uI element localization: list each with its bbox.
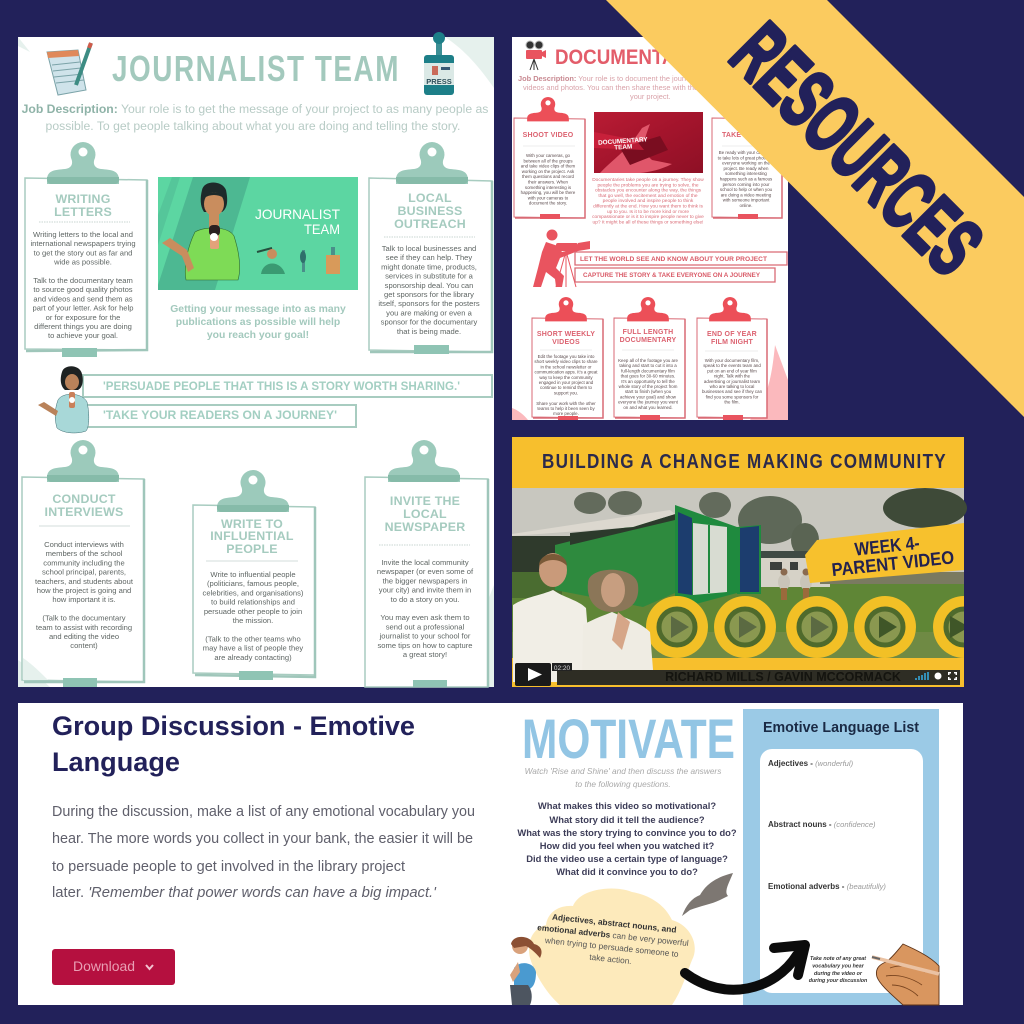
card: end of year film night: find you some sponsors for [706, 394, 759, 399]
card: conduct interviews: teachers, and students about [35, 577, 134, 586]
card: short weekly videos [532, 297, 603, 420]
card: end of year film night: END OF YEAR [707, 331, 757, 338]
questions: How did you feel when you watched it? [540, 840, 715, 851]
documentary description: compassionate or is it to inspire people never to give [592, 214, 704, 220]
strip: let the world see: LET THE WORLD SEE AND KNOW ABOUT YOUR PROJECT [580, 256, 768, 263]
questions: What story did it tell the audience? [549, 814, 705, 825]
panel: emotive language list: Abstract nouns - (confidence) [768, 820, 876, 829]
card: take photos: project. Be ready when [724, 166, 769, 171]
card: local business outreach [369, 142, 492, 354]
card: writing letters: international newspapers trying [30, 239, 136, 248]
card: write to influential people: INFLUENTIAL [210, 529, 294, 543]
card: shoot video: and take video clips of them [521, 164, 576, 169]
card: end of year film night: the film. [724, 400, 740, 405]
card: full length documentary: everyone the journey you went [618, 400, 679, 405]
card: writing letters: and videos and send them as [33, 294, 133, 303]
card: end of year film night: who are talking to local [710, 384, 754, 389]
card: write to influential people: may have a list of people they [203, 644, 303, 653]
card: invite the local newspaper: newspaper (or even some of [377, 567, 474, 576]
questions: Did the video use a certain type of language? [526, 853, 728, 864]
card: writing letters: Talk to the documentary team [33, 276, 133, 285]
card: invite the local newspaper: INVITE THE [390, 494, 460, 508]
card: writing letters: wide as possible. [53, 258, 112, 267]
card: end of year film night: put on an end of year film [707, 368, 757, 373]
card: full length documentary: full-length documentary film [621, 368, 675, 373]
callout: cloud: emotional adverbs can be very powerful [537, 922, 689, 948]
card: shoot video: between all of the groups [523, 158, 573, 163]
job description: Job Description: Your role is to document the journey of your project through [518, 74, 772, 83]
panel: emotive language list: vocabulary you hear [812, 964, 865, 970]
panel: video [512, 437, 967, 687]
documentary description: that go well, the excitement and emotion of the [598, 193, 698, 199]
icon: notepad and pencil [47, 43, 91, 95]
card: local business outreach: sponsor for the documentary [381, 318, 478, 327]
image: documentary team [594, 112, 703, 173]
card: writing letters: to source good quality photos [33, 285, 133, 294]
arrow [685, 945, 805, 990]
card: local business outreach: get sponsors for the library [384, 290, 474, 299]
card: conduct interviews: how the project is going and [37, 586, 131, 595]
card: invite the local newspaper: Invite the local community [381, 558, 469, 567]
card: short weekly videos: way to keep the community [539, 375, 593, 380]
documentary description: Documentaries take people on a journey. They show [592, 177, 704, 183]
card: take photos [712, 118, 782, 219]
card: take photos: are doing a video meeting [721, 192, 772, 197]
card: short weekly videos: continue to remind them to [540, 385, 593, 390]
questions: What makes this video so motivational? [538, 800, 716, 811]
card: end of year film night: night. Talk with the [714, 374, 751, 379]
card: end of year film night: advertising or journalist team [704, 379, 760, 384]
heading: motivate: MOTIVATE [522, 707, 735, 770]
card: full length documentary: whole story of the project from [619, 384, 678, 389]
card: local business outreach: that is being made. [397, 327, 461, 336]
card: short weekly videos: more people. [553, 411, 579, 416]
strip: let the world see [575, 252, 787, 265]
card: conduct interviews: community including the [43, 558, 125, 567]
card: write to influential people: (politicians, famous people, [207, 579, 299, 588]
card: full length documentary: start to finish (when you [625, 389, 672, 394]
badge: week 4 parent video: WEEK 4- [854, 532, 920, 560]
card: full length documentary [614, 297, 685, 420]
card: writing letters: LETTERS [54, 205, 112, 219]
icons: journalist tools [257, 247, 340, 274]
card: write to influential people [193, 470, 315, 680]
card: take photos: online. [740, 203, 752, 208]
image: documentary team: DOCUMENTARY [598, 136, 649, 147]
card: invite the local newspaper: journalist to your school for [379, 632, 471, 641]
card: take photos: with someone important [723, 198, 770, 203]
icon: runner [510, 937, 542, 1005]
card: invite the local newspaper: your city) and invite them in [379, 586, 471, 595]
card: shoot video: happening, you will be there [521, 190, 576, 195]
job description: videos and photos. You can then share these with the community and your [523, 83, 767, 92]
badge: week 4 parent video [805, 523, 964, 583]
card: full length documentary: FULL LENGTH [623, 329, 673, 336]
badge: week 4 parent video: PARENT VIDEO [831, 546, 955, 580]
caption: you reach your goal! [207, 330, 309, 341]
documentary description: people involved and inspire people to think [603, 198, 694, 204]
card: short weekly videos: in the school newsletter or [540, 364, 592, 369]
card: invite the local newspaper: the bigger newspapers in [383, 576, 467, 585]
play wheels [646, 596, 964, 658]
video controls: RICHARD MILLS / GAVIN MCCORMACK [665, 670, 901, 684]
card: invite the local newspaper: NEWSPAPER [385, 520, 465, 534]
card: local business outreach: sponsorship deal. You can [385, 281, 473, 290]
heading: Group Discussion - Emotive [52, 711, 415, 741]
card: full length documentary: DOCUMENTARY [620, 337, 676, 344]
questions: What was the story trying to convince you to do? [517, 827, 737, 838]
body text: later. 'Remember that power words can have a big impact.' [52, 885, 436, 901]
card: shoot video: document the story. [529, 201, 567, 206]
card: conduct interviews [22, 440, 144, 687]
panel: group discussion [18, 703, 963, 1005]
card: full length documentary: that goes for 30-60 minutes. [621, 374, 675, 379]
card: conduct interviews: and editing the video [49, 632, 119, 641]
icon: eagle [682, 873, 733, 916]
card: writing letters: WRITING [55, 192, 111, 206]
card: full length documentary: achieve your goal) and show [620, 394, 677, 399]
panel: emotive language list: during the video or [814, 971, 863, 977]
strip: capture the story: CAPTURE THE STORY & TAKE EVERYONE ON A JOURNEY [583, 272, 760, 279]
label: journalist team: JOURNALIST [255, 206, 340, 222]
callout: cloud: when trying to persuade someone to [544, 935, 679, 959]
card: full length documentary: Keep all of the footage you are [618, 358, 678, 363]
job description: possible. To get people talking about what you are doing and telling the story. [46, 119, 460, 133]
card: shoot video: SHOOT VIDEO [523, 132, 574, 139]
card: write to influential people: WRITE TO [221, 517, 283, 531]
card: shoot video: with your cameras to [528, 195, 569, 200]
panel: emotive language list: Emotive Language List [763, 720, 919, 736]
card: local business outreach: LOCAL [408, 191, 452, 205]
title: JOURNALIST TEAM [112, 48, 400, 89]
icon: movie camera [526, 41, 546, 70]
card: take photos: Be ready with your cameras [719, 150, 774, 155]
icon: press badge [424, 32, 454, 95]
video controls [515, 663, 960, 686]
presenters [513, 553, 654, 682]
card: local business outreach: itself, sponsors for the posters [378, 299, 480, 308]
icon: press badge: PRESS [426, 77, 452, 86]
heading: Language [52, 747, 180, 777]
card: take photos: everyone working on the [722, 161, 770, 166]
card: invite the local newspaper: send out a professional [386, 622, 465, 631]
card: end of year film night: FILM NIGHT [711, 339, 754, 346]
title: DOCUMENTARY TEAM [555, 46, 759, 69]
card: short weekly videos: engaged in your project and [539, 380, 594, 385]
card: local business outreach: BUSINESS [398, 204, 462, 218]
banner [606, 0, 1024, 417]
quote strip 2 [83, 405, 356, 427]
callout: cloud [529, 889, 695, 1005]
card: shoot video: working on the project. Ask [522, 169, 575, 174]
documentary description: obstacles you encounter along the way, the things [595, 188, 702, 194]
card: short weekly videos: SHORT WEEKLY [537, 331, 595, 338]
card: conduct interviews: team to assist with recording [36, 623, 132, 632]
card: writing letters [25, 142, 147, 357]
card: conduct interviews: school principal, parents, [42, 568, 126, 577]
panel: journalist team [18, 32, 494, 687]
card: write to influential people: the mission. [233, 616, 273, 625]
card: shoot video [514, 97, 585, 219]
card: conduct interviews: CONDUCT [52, 492, 116, 506]
card: write to influential people: (Talk to the other teams who [205, 634, 301, 643]
card: write to influential people: PEOPLE [226, 542, 278, 556]
documentary description: people the problems you are trying to solve, the [597, 182, 699, 188]
video title: BUILDING A CHANGE MAKING COMMUNITY [542, 451, 947, 473]
card: write to influential people: Write to influential people [210, 570, 296, 579]
card: local business outreach: OUTREACH [394, 217, 466, 231]
card: full length documentary: It's an opportunity to tell the [621, 379, 675, 384]
panel: emotive language list: Emotional adverbs - (beautifully) [768, 882, 886, 891]
card: writing letters: to achieve your goal. [48, 331, 118, 340]
image: journalist team banner [158, 177, 358, 290]
documentary description: up? It might be all of these things or something else! [593, 219, 703, 225]
card: writing letters: Writing letters to the local and [33, 230, 133, 239]
card: end of year film night: With your documentary film, [705, 358, 759, 363]
card: invite the local newspaper [365, 440, 488, 687]
card: short weekly videos: support you. [554, 390, 578, 395]
card: full length documentary: taking and start to cut it into a [619, 363, 677, 368]
card: shoot video: something interesting is [525, 185, 572, 190]
job description: your project. [630, 92, 671, 101]
card: conduct interviews: INTERVIEWS [45, 505, 123, 519]
instruction: to the following questions. [575, 779, 671, 789]
quote strip 1: 'PERSUADE PEOPLE THAT THIS IS A STORY WORTH SHARING.' [103, 379, 460, 393]
card: take photos: to take lots of great photos of [718, 155, 775, 160]
card: write to influential people: to build relationships and [211, 598, 295, 607]
card: take photos: TAKE PHOTOS [722, 132, 774, 139]
card: local business outreach: you are making or even a [386, 308, 473, 317]
card: invite the local newspaper: a great story! [403, 650, 447, 659]
body text: to persuade people to get involved in the library project [52, 859, 405, 875]
job description: Job Description: Your role is to get the message of your project to as many people as [22, 102, 488, 116]
card: invite the local newspaper: LOCAL [403, 507, 447, 521]
panel: emotive language list: during your discussion [809, 978, 868, 984]
card: invite the local newspaper: some tips on how to capture [378, 641, 472, 650]
card: conduct interviews: (Talk to the documentary [42, 614, 126, 623]
card: full length documentary: on and what you learned. [623, 405, 673, 410]
callout: cloud: take action. [589, 952, 632, 966]
card: writing letters: different things you are doing [34, 322, 132, 331]
card: conduct interviews: how important it is. [52, 595, 116, 604]
questions: What did it convince you to do? [556, 866, 698, 877]
callout: cloud: Adjectives, abstract nouns, and [552, 912, 677, 935]
label: journalist team: TEAM [304, 221, 340, 237]
card: conduct interviews: Conduct interviews with [44, 540, 124, 549]
caption: publications as possible will help [176, 317, 340, 328]
card: invite the local newspaper: You may even ask them to [380, 613, 470, 622]
card: writing letters: or for exposure for the [46, 313, 120, 322]
card: short weekly videos: communication apps. It's a great [534, 370, 598, 375]
card: shoot video: With your cameras, go [526, 153, 571, 158]
card: short weekly videos: VIDEOS [552, 339, 580, 346]
icon: writing hand [872, 944, 939, 1005]
card: take photos: something interesting [725, 171, 767, 176]
card: shoot video: their answers. When [528, 180, 569, 184]
card: conduct interviews: content) [70, 641, 98, 650]
button: download [52, 949, 175, 985]
instruction: Watch 'Rise and Shine' and then discuss the answers [525, 766, 721, 776]
body text: During the discussion, make a list of any emotional vocabulary you [52, 804, 475, 820]
panel: emotive language list [743, 709, 939, 1005]
quote strip 2: 'TAKE YOUR READERS ON A JOURNEY' [103, 408, 337, 422]
illustration: reporter [162, 182, 240, 280]
card: local business outreach: might donate time, products, [381, 262, 477, 271]
card: local business outreach: services in substitute for a [385, 272, 474, 281]
card: short weekly videos: Share your work with the other [536, 401, 596, 406]
video scene [512, 488, 967, 658]
panel: emotive language list: Adjectives - (wonderful) [768, 759, 854, 768]
button: download: Download [73, 958, 135, 974]
card: short weekly videos: teams to help it been seen by [537, 406, 595, 411]
video controls: 02:20 [554, 665, 571, 672]
card: short weekly videos: short weekly video clips to share [534, 359, 598, 364]
icon: cameraman [533, 230, 590, 287]
card: local business outreach: Talk to local businesses and [382, 244, 476, 253]
body text: hear. The more words you collect in your bank, the easier it will be [52, 831, 473, 847]
panel: emotive language list: Take note of any great [810, 956, 866, 962]
card: take photos: happens such as a famous [720, 176, 773, 182]
documentary description: up to you. Is it to be more kind or more [607, 209, 689, 215]
card: writing letters: to get the story out as far and [34, 248, 132, 257]
caption: Getting your message into as many [170, 304, 346, 315]
card: conduct interviews: members of the school [46, 549, 123, 558]
strip: capture the story [575, 268, 775, 282]
panel: documentary team [512, 37, 788, 420]
documentary description: differently at the end. How you want them to think is [593, 204, 703, 210]
card: shoot video: them questions and record [522, 174, 575, 179]
card: end of year film night [697, 297, 767, 420]
card: take photos: person coming into your [723, 182, 770, 187]
quote strip 1 [83, 375, 492, 397]
icon: small reporter [38, 366, 89, 433]
card: invite the local newspaper: to do a story on you. [391, 595, 459, 604]
image: documentary team: TEAM [614, 143, 633, 152]
card: write to influential people: are already contacting) [214, 653, 292, 662]
card: short weekly videos: Edit the footage you take into [538, 354, 595, 359]
card: write to influential people: persuade other people to join [204, 607, 302, 616]
card: writing letters: part of your letter. Ask for help [33, 304, 133, 313]
card: end of year film night: speak to the events team and [703, 363, 761, 368]
card: end of year film night: businesses and see if they can [702, 389, 763, 394]
card: take photos: school to help or when you [720, 187, 773, 192]
card: local business outreach: see if they can help. They [386, 253, 472, 262]
card: write to influential people: celebrities, and organisations) [203, 588, 304, 597]
